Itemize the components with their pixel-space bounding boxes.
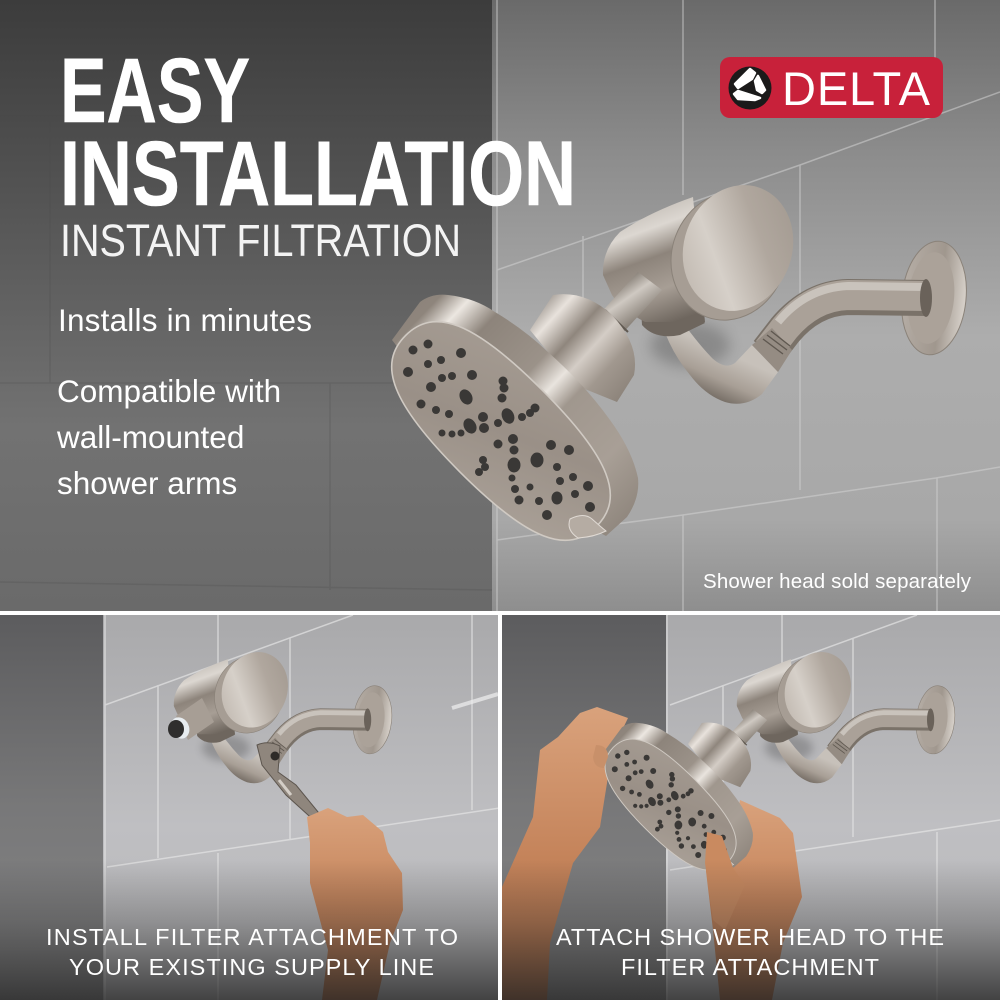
benefit: installs in minutes: Installs in minutes — [58, 302, 312, 338]
left hand and arm — [500, 707, 628, 1000]
disclaimer: Shower head sold separately — [703, 570, 972, 593]
product: filter attachment — [737, 643, 958, 783]
caption: step 2 line 1: ATTACH SHOWER HEAD TO THE — [556, 924, 944, 950]
caption: step 2 line 2: FILTER ATTACHMENT — [621, 954, 879, 980]
tiled wall — [103, 615, 498, 1000]
product: filter attachment on shower arm — [603, 169, 972, 404]
tiled wall background — [492, 0, 1000, 611]
product: shower head — [390, 274, 660, 542]
tiled wall — [666, 615, 1000, 1000]
panel: hero photo of installed filter and shower head — [0, 0, 1000, 611]
icon: Delta triangle mark — [728, 66, 772, 110]
caption: step 1 line 2: YOUR EXISTING SUPPLY LINE — [69, 954, 434, 980]
dark left wall — [0, 615, 103, 1000]
filter threaded outlet — [167, 698, 214, 742]
panel: step 2 attach shower head — [500, 615, 1000, 1000]
benefit: compatibility: wall-mounted — [56, 419, 244, 455]
hand holding wrench — [307, 808, 403, 1000]
product: shower head held in hands — [604, 712, 767, 870]
panel: step 1 install filter — [0, 615, 500, 1000]
right hand behind head — [705, 800, 802, 1000]
subheading: INSTANT FILTRATION — [60, 215, 461, 266]
caption: step 1 line 1: INSTALL FILTER ATTACHMENT TO — [46, 924, 458, 950]
right thumb on shower head — [705, 832, 732, 929]
wordmark: DELTA — [782, 62, 931, 115]
benefit: compatibility: shower arms — [57, 465, 237, 501]
logo: Delta — [720, 57, 943, 118]
heading: installation: INSTALLATION — [60, 123, 576, 225]
caption gradient — [0, 860, 498, 1000]
dark left wall — [502, 615, 666, 1000]
product: filter attachment — [174, 643, 395, 783]
benefit: compatibility: Compatible with — [57, 373, 281, 409]
wrench — [256, 742, 319, 816]
heading: easy: EASY — [60, 40, 250, 142]
dark left wall — [0, 0, 492, 611]
caption gradient — [502, 860, 1000, 1000]
left thumb on shower head — [593, 745, 608, 768]
